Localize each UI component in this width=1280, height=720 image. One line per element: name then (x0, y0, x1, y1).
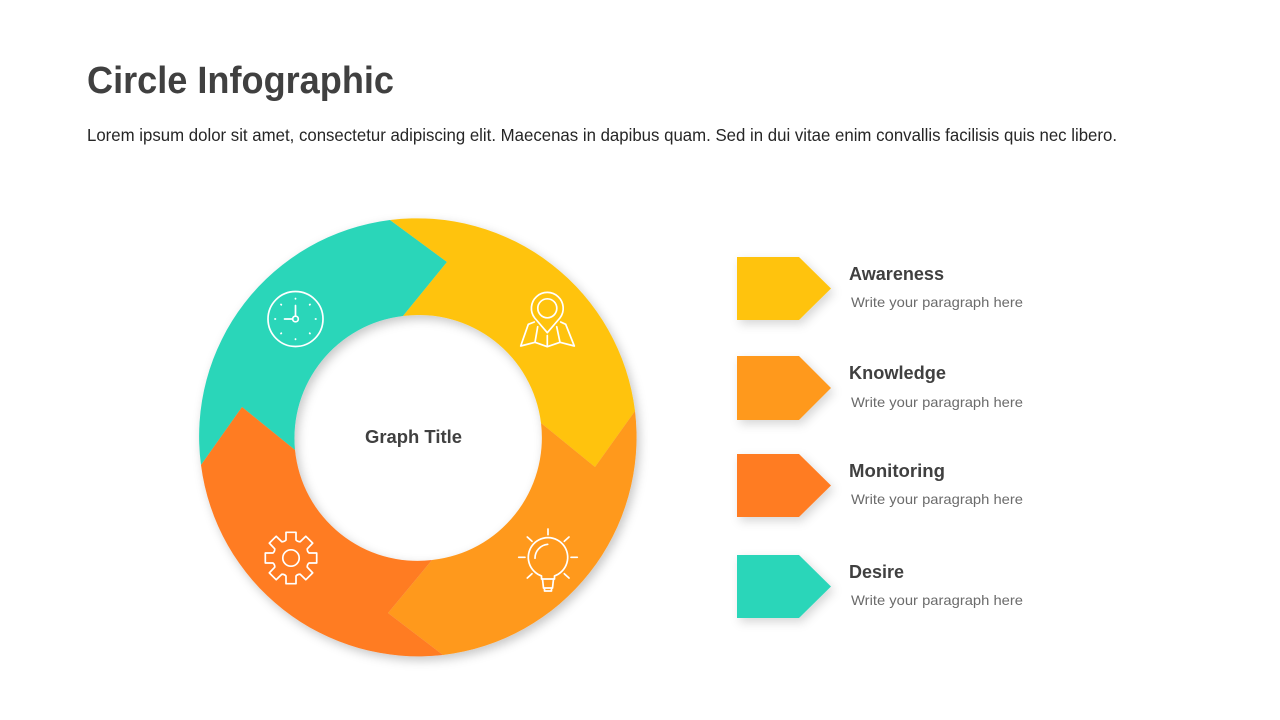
subtitle paragraph: Lorem ipsum dolor sit amet, consectetur adipiscing elit. Maecenas in dapibus quam. Sed in dui vitae enim convallis facilisis quis nec libero. (87, 125, 1117, 145)
arrow marker: awareness (737, 257, 831, 320)
label: knowledge: Knowledge (849, 363, 946, 383)
label: awareness: Awareness (849, 264, 944, 284)
icon: gear (265, 532, 317, 584)
label: monitoring: Monitoring (849, 461, 945, 481)
segment: desire (199, 220, 447, 465)
icon: map pin (521, 292, 574, 347)
legend item: knowledge (737, 356, 1023, 420)
description: desire: Write your paragraph here (851, 592, 1023, 608)
graph title: Graph Title (365, 427, 462, 447)
icon: clock (268, 292, 323, 346)
description: awareness: Write your paragraph here (851, 294, 1023, 310)
segment: awareness (390, 218, 635, 467)
circular ring chart (199, 218, 637, 656)
title: Circle Infographic (87, 60, 394, 102)
segment: monitoring (201, 407, 443, 656)
arrow marker: desire (737, 555, 831, 618)
arrow marker: knowledge (737, 356, 831, 420)
icon: light bulb (519, 529, 577, 591)
legend item: monitoring (737, 454, 1023, 517)
description: knowledge: Write your paragraph here (851, 394, 1023, 410)
legend item: awareness (737, 257, 1023, 320)
description: monitoring: Write your paragraph here (851, 491, 1023, 507)
label: desire: Desire (849, 562, 904, 582)
ring segments (199, 218, 637, 656)
arrow marker: monitoring (737, 454, 831, 517)
segment: knowledge (388, 411, 637, 655)
legend item: desire (737, 555, 1023, 618)
